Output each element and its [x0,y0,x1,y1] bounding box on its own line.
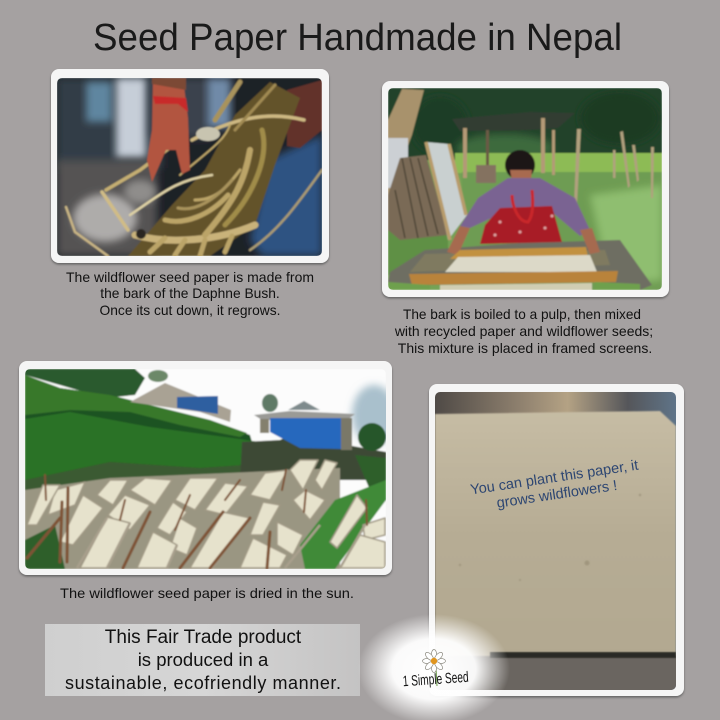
house [254,411,355,420]
wooden screen [450,247,588,259]
title: Seed Paper Handmade in Nepal [93,17,622,59]
woman [505,150,535,180]
logo wordmark: 1 Simple Seed [402,669,469,690]
photo frame [429,384,684,696]
logo: 1 Simple Seed [358,614,510,720]
fair trade statement box: is produced in a [138,649,269,670]
photograph: hands holding bark [57,78,322,256]
caption: drying: The wildflower seed paper is dried in the sun. [60,585,354,601]
callout: plant this paper: grows wildflowers ! [496,478,618,512]
photo frame [51,69,329,263]
fair trade statement box [45,624,360,696]
fair trade statement box: This Fair Trade product [105,627,302,648]
callout: plant this paper [469,458,642,515]
callout: plant this paper: You can plant this paper, it [469,458,639,498]
frames [27,460,385,568]
panel: bark photo [51,69,329,263]
trough [388,240,652,290]
fair trade statement box: sustainable, ecofriendly manner. [65,673,341,693]
photo frame [19,361,392,575]
panel: drying photo [19,361,396,575]
panel: plantable paper photo [429,384,684,696]
hillside under frames [25,468,340,569]
caption: pulp line 3: This mixture is placed in framed screens. [398,340,652,356]
caption: bark line 2: the bark of the Daphne Bush. [100,286,280,301]
photograph: woman at framed screen [388,88,662,290]
photo frame [382,81,669,297]
photograph: paper frames drying on hillside [25,369,396,569]
icon: daisy [422,650,446,686]
caption: bark: The wildflower seed paper is made from [66,270,314,285]
photograph: seed paper sheet [435,392,676,690]
caption: bark line 3: Once its cut down, it regrows. [100,303,280,318]
panel: pulp screen photo [382,81,669,297]
caption: pulp line 2: with recycled paper and wildflower seeds; [394,323,653,339]
caption: pulp: The bark is boiled to a pulp, then mixed [403,306,641,322]
